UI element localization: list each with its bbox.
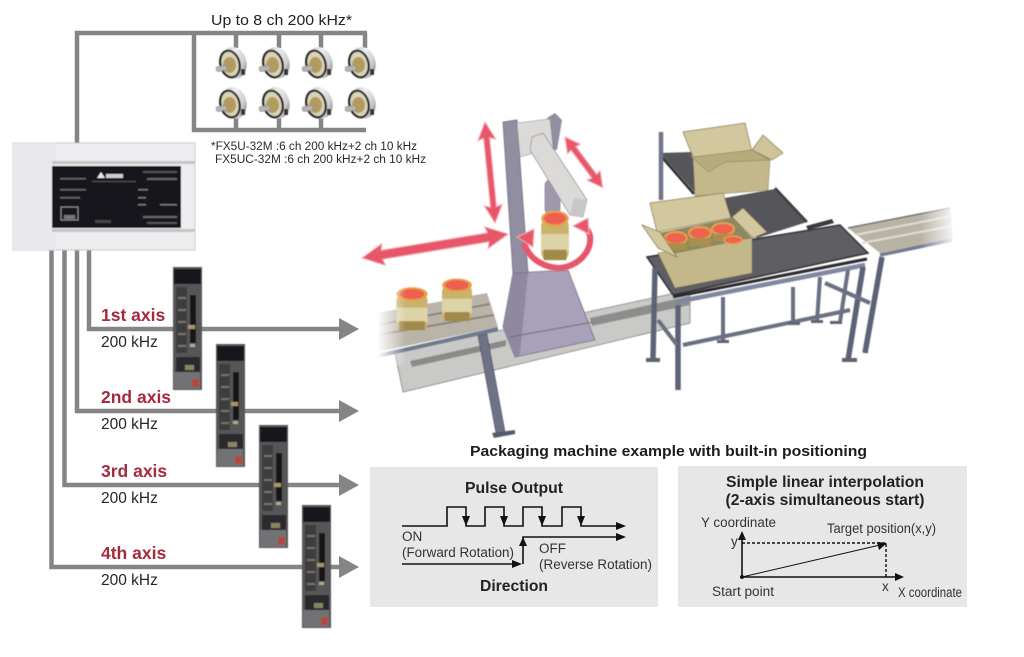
lower carton with jars — [642, 193, 767, 288]
footnote: channel specifications: FX5UC-32M :6 ch 200 kHz+2 ch 10 kHz — [215, 154, 426, 166]
arrow: arm extension — [559, 132, 609, 192]
panel heading: linear interpolation: Simple linear interpolation — [726, 474, 924, 491]
footnote: channel specifications: *FX5U-32M :6 ch 200 kHz+2 ch 10 kHz — [211, 141, 417, 153]
robot arm — [530, 133, 587, 217]
servo amplifiers: four drive units — [173, 267, 331, 628]
controller: PLC unit — [13, 143, 195, 250]
labels: axis names and frequencies: 200 kHz — [101, 490, 158, 507]
heading: up to 8 channels: Up to 8 ch 200 kHz* — [211, 12, 352, 29]
controller front panel — [52, 166, 181, 228]
caption: packaging machine example: Packaging machine example with built-in positioning — [470, 443, 867, 460]
panel heading: pulse output: Pulse Output — [465, 480, 563, 497]
gripped jar — [541, 211, 569, 260]
labels: axis names and frequencies: 200 kHz — [101, 334, 158, 351]
robot pillar and base — [503, 113, 595, 357]
lower conveyor table — [646, 225, 882, 390]
interpolation chart — [738, 531, 904, 581]
arrow: vertical travel — [476, 121, 504, 224]
chart labels: x — [882, 579, 889, 594]
panel heading: linear interpolation: (2-axis simultaneous start) — [726, 492, 924, 509]
pulse waveform — [402, 507, 620, 564]
chart labels — [701, 515, 962, 600]
labels: axis names and frequencies — [101, 305, 171, 589]
footnote: channel specifications — [211, 141, 426, 166]
left conveyor with jars — [370, 278, 515, 438]
labels: axis names and frequencies: 200 kHz — [101, 572, 158, 589]
panel heading: linear interpolation — [726, 474, 924, 509]
icon group: eight encoders — [216, 44, 379, 121]
upper conveyor — [660, 132, 834, 238]
chart labels: Target position(x,y) — [827, 521, 936, 536]
labels: axis names and frequencies: 1st axis — [101, 305, 165, 325]
chart labels: Start point — [712, 584, 774, 599]
chart labels: y — [731, 534, 738, 549]
base rail behind the machine — [395, 290, 690, 392]
direction state labels: ON — [402, 529, 422, 544]
labels: axis names and frequencies: 4th axis — [101, 543, 166, 563]
wiring: controller to encoders — [77, 33, 367, 145]
direction state labels: (Forward Rotation) — [402, 545, 514, 560]
wiring: controller to axes with arrows — [52, 248, 359, 578]
illustration: packaging machine — [370, 113, 958, 438]
panel: pulse output — [370, 467, 658, 607]
direction state labels: (Reverse Rotation) — [539, 557, 652, 572]
direction state labels — [402, 529, 652, 572]
motion arrows: red axis indicators — [360, 121, 609, 269]
chart labels: X coordinate — [898, 585, 962, 600]
right conveyor — [848, 200, 958, 255]
labels: axis names and frequencies: 2nd axis — [101, 387, 171, 407]
chart labels: Y coordinate — [701, 515, 776, 530]
labels: axis names and frequencies: 3rd axis — [101, 461, 167, 481]
panel label: direction: Direction — [480, 578, 548, 595]
labels: axis names and frequencies: 200 kHz — [101, 416, 158, 433]
panel: linear interpolation — [678, 466, 967, 607]
arrow: horizontal travel — [360, 223, 510, 269]
direction state labels: OFF — [539, 541, 566, 556]
upper open carton — [683, 123, 783, 196]
waveform arrowheads — [462, 516, 626, 568]
arrow: jar rotation — [517, 218, 590, 268]
